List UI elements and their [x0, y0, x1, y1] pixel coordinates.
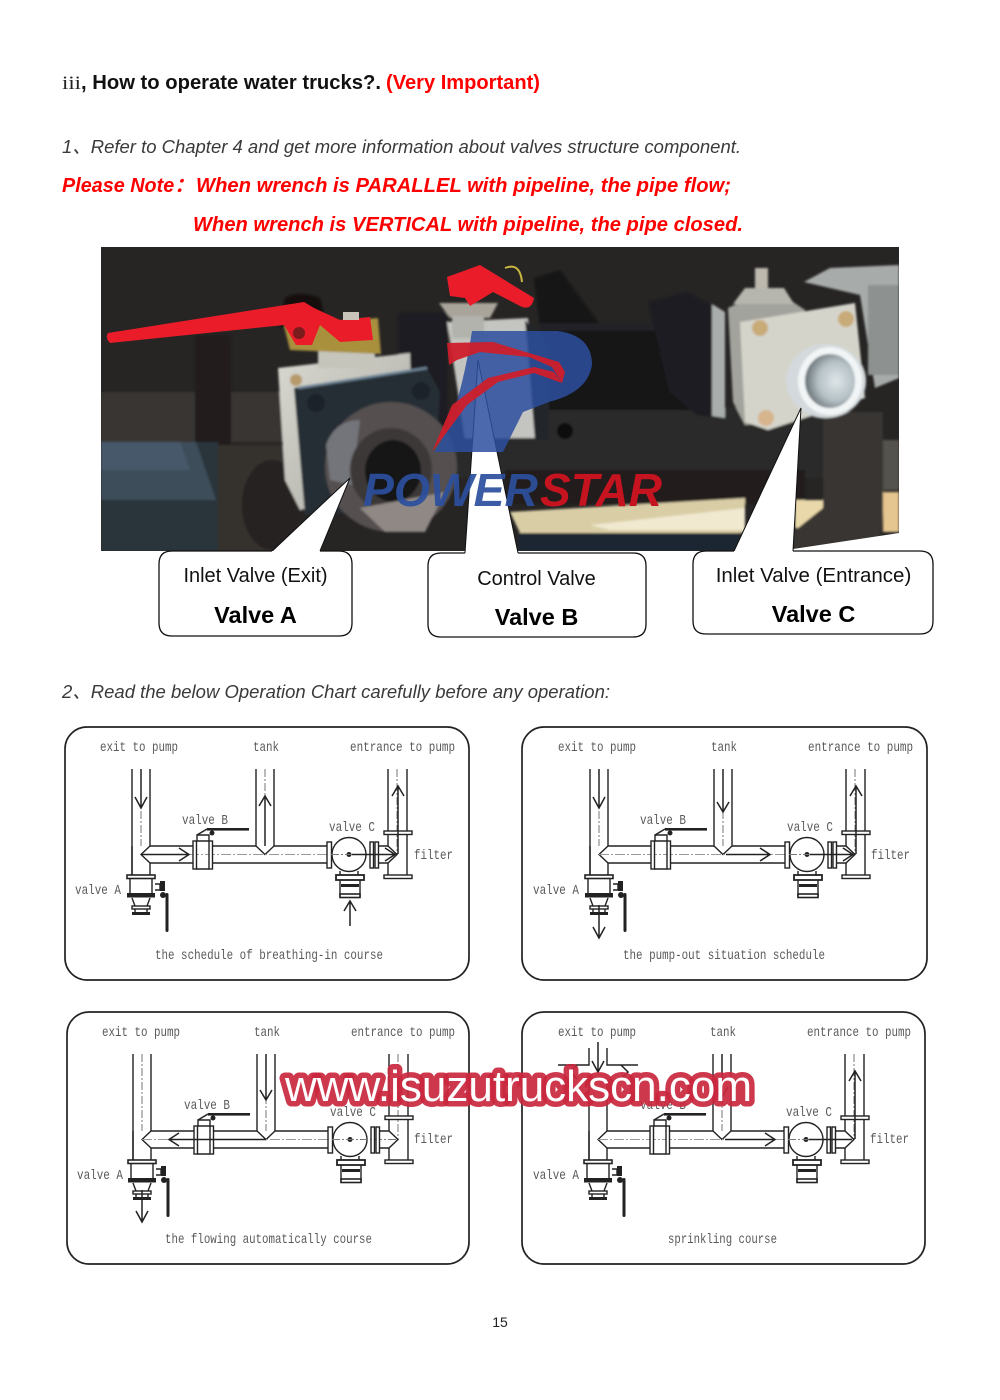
- panel: breathing-in course: valve B: [182, 813, 228, 829]
- callout wedges: [272, 360, 899, 554]
- panel: pump-out situation: exit to pump: [558, 740, 636, 756]
- instruction 2: 2、Read the below Operation Chart carefully before any operation:: [61, 682, 610, 702]
- panel: sprinkling course: valve A: [533, 1168, 579, 1184]
- callout: valve C: Valve C: [772, 601, 855, 627]
- title: [62, 72, 540, 94]
- panel: breathing-in course: valve A: [75, 883, 121, 899]
- panel: breathing-in course: filter: [414, 848, 453, 864]
- red note: When wrench is VERTICAL with pipeline, the pipe closed.: [193, 214, 743, 236]
- panel: flowing automatically course: filter: [414, 1132, 453, 1148]
- panel: breathing-in course: entrance to pump: [350, 740, 455, 756]
- panel: sprinkling course: entrance to pump: [807, 1025, 911, 1041]
- panel: pump-out situation: tank: [711, 740, 737, 756]
- callout: valve B: Control Valve: [477, 568, 596, 590]
- panel: pump-out situation: the pump-out situation schedule: [623, 948, 825, 964]
- panel: sprinkling course: valve B: [640, 1098, 686, 1114]
- panel: flowing automatically course: valve A: [77, 1168, 123, 1184]
- photo: valves on truck: [101, 247, 899, 551]
- red note: Please Note：: [62, 175, 194, 197]
- panel: sprinkling course: valve C: [786, 1105, 832, 1121]
- panel: breathing-in course: valve C: [329, 820, 375, 836]
- panel: flowing automatically course: tank: [254, 1025, 280, 1041]
- panel: breathing-in course: exit to pump: [100, 740, 178, 756]
- panel: pump-out situation: valve C: [787, 820, 833, 836]
- panel: pump-out situation: valve B: [640, 813, 686, 829]
- panel: flowing automatically course: valve C: [330, 1105, 376, 1121]
- callout: valve B: [428, 553, 646, 637]
- title: iii: [62, 73, 81, 94]
- title: (Very Important): [386, 72, 540, 94]
- panel: flowing automatically course: valve B: [184, 1098, 230, 1114]
- logo watermark: powerstar: [363, 331, 662, 516]
- callout: valve C: Inlet Valve (Entrance): [716, 564, 911, 587]
- panel: sprinkling course: [522, 1012, 925, 1264]
- website watermark: www.isuzutruckscn.com: [284, 1062, 752, 1111]
- panel: sprinkling course: tank: [710, 1025, 736, 1041]
- panel: sprinkling course: filter: [870, 1132, 909, 1148]
- panel: flowing automatically course: [67, 1012, 469, 1264]
- panel: pump-out situation: valve A: [533, 883, 579, 899]
- logo watermark: powerstar: STAR: [540, 464, 662, 516]
- callout: valve A: Inlet Valve (Exit): [183, 565, 328, 587]
- panel: breathing-in course: tank: [253, 740, 279, 756]
- callout: valve C: [693, 551, 933, 634]
- callout: valve A: [159, 551, 352, 636]
- panel: sprinkling course: sprinkling course: [668, 1232, 777, 1248]
- instruction 1: 1、Refer to Chapter 4 and get more information about valves structure component.: [62, 137, 741, 157]
- panel: sprinkling course: exit to pump: [558, 1025, 636, 1041]
- panel: pump-out situation: filter: [871, 848, 910, 864]
- title: , How to operate water trucks?.: [81, 72, 381, 94]
- panel: flowing automatically course: entrance to pump: [351, 1025, 455, 1041]
- panel: flowing automatically course: exit to pump: [102, 1025, 180, 1041]
- callout: valve A: Valve A: [214, 602, 297, 628]
- page number: 15: [492, 1314, 508, 1330]
- red note: When wrench is PARALLEL with pipeline, the pipe flow;: [196, 175, 731, 197]
- callout: valve B: Valve B: [495, 604, 578, 630]
- panel: breathing-in course: [65, 727, 469, 980]
- panel: flowing automatically course: the flowing automatically course: [165, 1232, 372, 1248]
- panel: breathing-in course: the schedule of breathing-in course: [155, 948, 383, 964]
- red note: [62, 175, 743, 236]
- panel: pump-out situation: [522, 727, 927, 980]
- panel: pump-out situation: entrance to pump: [808, 740, 913, 756]
- logo watermark: powerstar: POWER: [363, 464, 538, 516]
